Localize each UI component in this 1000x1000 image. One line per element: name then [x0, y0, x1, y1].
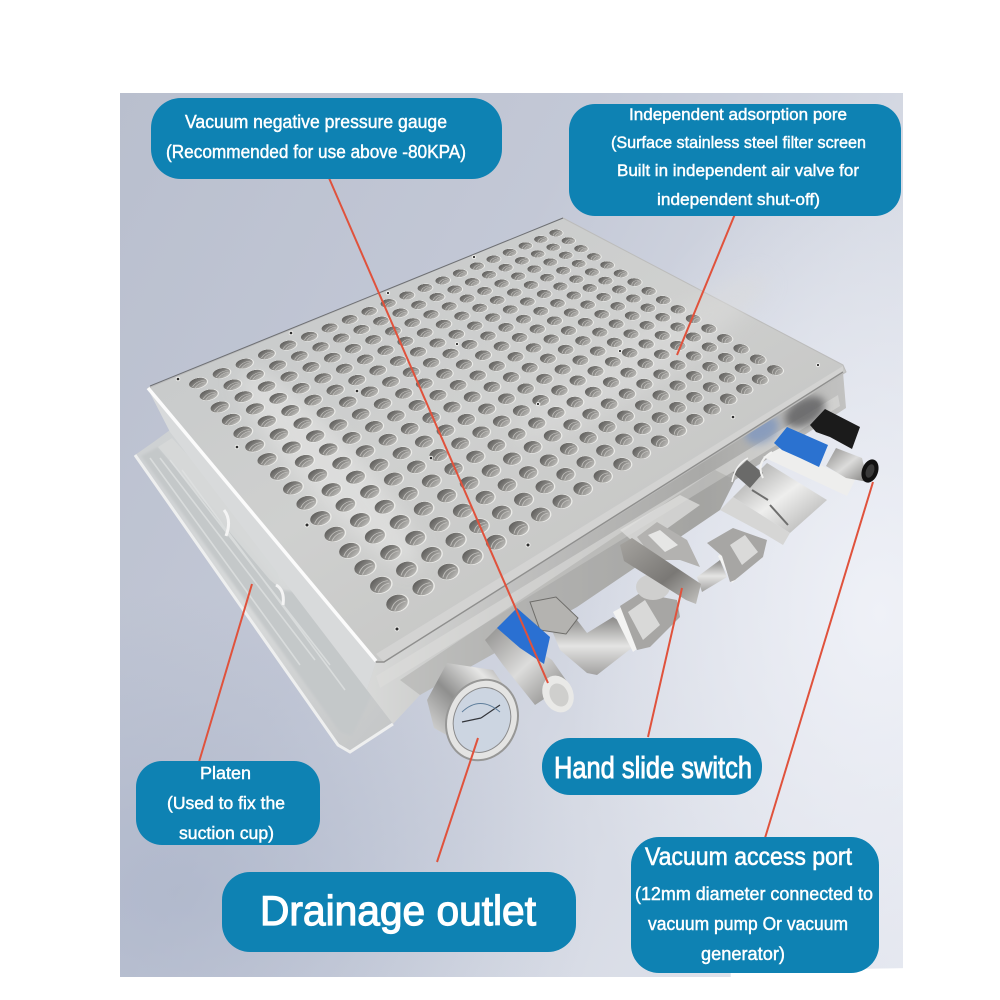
black valve handle: [810, 409, 860, 449]
adsorption hole grid: [189, 230, 784, 612]
right bracket and manifold: [720, 448, 855, 545]
callout: vacuum negative pressure gauge: Vacuum negative pressure gauge: [185, 112, 447, 132]
photo background: [120, 93, 903, 977]
callout: hand slide switch: [542, 738, 762, 795]
callout: independent adsorption pore: Independent adsorption pore: [629, 105, 847, 124]
drain ball valve: [485, 608, 580, 718]
right blue valve handle: [774, 427, 828, 467]
callout: independent adsorption pore: [569, 104, 901, 216]
callout: platen: Platen: [200, 763, 251, 783]
right push-in fitting: [826, 448, 882, 485]
callout: drainage outlet: [222, 872, 576, 952]
plate top surface: [148, 218, 846, 662]
callout: platen: [136, 761, 320, 845]
callout: vacuum access port: vacuum pump Or vacuum: [648, 914, 848, 934]
pipe run: [530, 522, 767, 675]
callout: vacuum negative pressure gauge: (Recommended for use above -80KPA): [166, 142, 466, 162]
plate side body: [150, 372, 846, 724]
callout: independent adsorption pore: (Surface stainless steel filter screen: [611, 133, 866, 152]
platen flange: [135, 430, 393, 752]
hand slide switch lever: [620, 538, 701, 604]
callout: drainage outlet: Drainage outlet: [260, 887, 536, 934]
callout: platen: suction cup): [179, 823, 274, 843]
callout: vacuum access port: generator): [701, 944, 785, 964]
callout: vacuum access port: (12mm diameter connected to: [635, 884, 873, 904]
callout: vacuum access port: Vacuum access port: [645, 843, 852, 871]
callout: hand slide switch: Hand slide switch: [554, 750, 752, 785]
callout: independent adsorption pore: independent shut-off): [657, 190, 820, 209]
vacuum gauge: [427, 663, 530, 771]
screw holes: [176, 255, 820, 631]
callout: independent adsorption pore: Built in independent air valve for: [617, 161, 859, 180]
callout: vacuum access port: [631, 837, 879, 973]
callout: vacuum negative pressure gauge: [151, 98, 502, 179]
callout: platen: (Used to fix the: [167, 793, 285, 813]
